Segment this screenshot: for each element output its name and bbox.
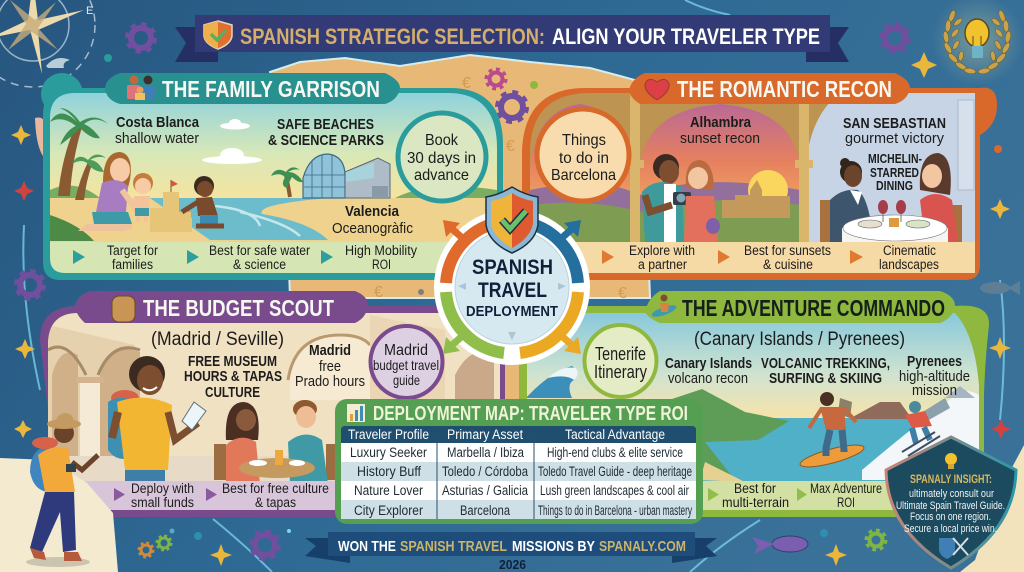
label: costa blanca bbox=[115, 114, 200, 147]
hub text: DEPLOYMENT bbox=[466, 304, 558, 320]
strip: budget takeaways: Deploy with bbox=[131, 481, 194, 496]
subheading: madrid seville: (Madrid / Seville) bbox=[151, 329, 284, 350]
insight text: SPANALY INSIGHT: bbox=[910, 472, 992, 486]
figure: man with camera bbox=[642, 154, 691, 242]
insight text: Secure a local price win. bbox=[904, 523, 997, 535]
table header row: Tactical Advantage bbox=[565, 427, 665, 442]
callout: book 30 days: advance bbox=[414, 167, 469, 184]
header pill bbox=[75, 291, 368, 323]
label: safe beaches: & SCIENCE PARKS bbox=[268, 132, 384, 149]
decorative euro signs bbox=[374, 75, 627, 302]
label: canary islands: Canary Islands bbox=[665, 355, 752, 372]
icon: insight bulb bbox=[945, 453, 957, 469]
scene: alhambra and dining bbox=[530, 93, 978, 243]
label: canary islands bbox=[665, 355, 752, 387]
panel: the budget scout bbox=[40, 291, 505, 517]
table bbox=[239, 450, 315, 478]
heading: THE ADVENTURE COMMANDO bbox=[682, 295, 945, 321]
decorative euro signs: € bbox=[618, 285, 627, 302]
label: madrid prado: free bbox=[319, 358, 341, 375]
label: costa blanca: Costa Blanca bbox=[116, 114, 200, 131]
strip: family takeaways: & science bbox=[233, 257, 286, 272]
label: alhambra bbox=[680, 114, 760, 147]
strip: adventure takeaways: Best for bbox=[734, 481, 776, 496]
callout: things to do: Things bbox=[562, 132, 606, 149]
building: oceanografic bbox=[303, 154, 390, 198]
figure: boy bbox=[182, 176, 224, 226]
callout: madrid budget guide bbox=[370, 326, 442, 398]
label: san sebastian: gourmet victory bbox=[845, 130, 944, 147]
heading: THE FAMILY GARRISON bbox=[162, 76, 380, 102]
strip: romantic takeaways: & cuisine bbox=[763, 257, 813, 272]
row: city explorer: Barcelona bbox=[460, 503, 510, 518]
strip: adventure takeaways: multi-terrain bbox=[722, 495, 789, 510]
figure: backpacker with phone bbox=[108, 356, 206, 484]
figure: child bbox=[133, 173, 153, 222]
figure: woman in coral bbox=[684, 160, 720, 242]
row: luxury seeker: High-end clubs & elite service bbox=[547, 445, 683, 460]
label: madrid prado bbox=[295, 342, 365, 390]
fish: purple bbox=[752, 536, 808, 554]
scene: coast and mountains bbox=[527, 313, 979, 481]
label: pyrenees: mission bbox=[912, 382, 957, 399]
scene: plaza and tapas bbox=[48, 313, 500, 482]
row: nature lover: Asturias / Galicia bbox=[442, 483, 528, 498]
icon: central shield bbox=[486, 187, 538, 253]
row: city explorer: Things to do in Barcelona - urban mastery bbox=[538, 503, 692, 518]
hub text: SPANISH bbox=[472, 256, 553, 279]
compass rose: E bbox=[86, 5, 93, 17]
label: canary islands: volcano recon bbox=[668, 370, 748, 387]
strip: romantic takeaways: a partner bbox=[638, 257, 687, 272]
figure: diner man bbox=[288, 400, 336, 484]
strip: romantic takeaways: landscapes bbox=[879, 257, 939, 272]
quadrant arrows bbox=[446, 223, 578, 353]
subheading: canary pyrenees: (Canary Islands / Pyrenees) bbox=[694, 329, 905, 350]
compass rose bbox=[0, 0, 95, 87]
header pill bbox=[105, 73, 400, 104]
strip: adventure takeaways: ROI bbox=[837, 495, 855, 510]
label: michelin dining: DINING bbox=[876, 178, 913, 193]
decorative euro signs: € bbox=[462, 75, 471, 92]
wave bbox=[526, 366, 577, 398]
callout: book 30 days bbox=[398, 113, 486, 201]
hub text: TRAVEL bbox=[478, 279, 547, 302]
table bbox=[842, 200, 948, 242]
label: michelin dining: MICHELIN- bbox=[868, 151, 922, 166]
hub text bbox=[466, 256, 558, 320]
icon: backpack bbox=[112, 296, 135, 322]
figure: diner woman bbox=[214, 402, 260, 484]
footer text: MISSIONS BY bbox=[512, 538, 595, 555]
figure: diner right bbox=[920, 153, 962, 242]
palm trees bbox=[50, 108, 108, 200]
row: nature lover bbox=[354, 483, 689, 498]
row: city explorer bbox=[354, 503, 692, 518]
hub chevrons bbox=[458, 283, 566, 340]
label: volcanic trekking bbox=[761, 355, 890, 387]
icon: title shield bbox=[204, 21, 232, 49]
strip: family takeaways: ROI bbox=[372, 257, 391, 272]
row: luxury seeker: Luxury Seeker bbox=[350, 445, 427, 460]
figure: mother bbox=[84, 152, 140, 229]
strip: budget takeaways: small funds bbox=[131, 495, 194, 510]
row: nature lover: Nature Lover bbox=[354, 483, 423, 498]
parchment corner: bottom left bbox=[0, 458, 118, 572]
label: san sebastian: SAN SEBASTIAN bbox=[843, 115, 946, 132]
label: pyrenees: Pyrenees bbox=[907, 353, 962, 370]
footer text: SPANALY.COM bbox=[599, 538, 686, 555]
title text: SPANISH STRATEGIC SELECTION: bbox=[240, 24, 545, 49]
palm small bbox=[286, 175, 290, 197]
label: free museum: HOURS & TAPAS bbox=[184, 368, 282, 385]
row: city explorer: City Explorer bbox=[354, 503, 423, 518]
fish: upper right bbox=[980, 281, 1020, 295]
table header row bbox=[348, 427, 665, 442]
table header row: Traveler Profile bbox=[348, 427, 429, 442]
icon: heart bbox=[645, 79, 669, 100]
callout: tenerife itinerary: Tenerife bbox=[595, 344, 646, 364]
insight text bbox=[896, 472, 1005, 535]
label: pyrenees: high-altitude bbox=[899, 368, 970, 385]
heading: THE ROMANTIC RECON bbox=[677, 76, 892, 102]
label: costa blanca: shallow water bbox=[115, 130, 199, 147]
strip: family takeaways: Best for safe water bbox=[209, 243, 310, 258]
label: free museum: FREE MUSEUM bbox=[188, 353, 277, 370]
strip: family takeaways: families bbox=[112, 257, 153, 272]
figure: surfer bbox=[798, 392, 866, 471]
callout: madrid budget guide: guide bbox=[393, 372, 420, 388]
footer text bbox=[338, 538, 686, 555]
snow slope bbox=[862, 391, 985, 480]
clouds bbox=[202, 119, 262, 164]
center hub: spanish travel deployment bbox=[434, 187, 590, 365]
label: alhambra: sunset recon bbox=[680, 130, 760, 147]
label: free museum: CULTURE bbox=[205, 384, 260, 401]
label: madrid prado: Madrid bbox=[309, 342, 351, 359]
volcano bbox=[849, 402, 912, 419]
figure: traveler with backpack bbox=[26, 413, 98, 567]
figure: diner left bbox=[820, 158, 872, 242]
label: safe beaches bbox=[268, 116, 384, 149]
title text: ALIGN YOUR TRAVELER TYPE bbox=[552, 24, 820, 49]
label: valencia bbox=[332, 203, 413, 237]
panel: deployment map table bbox=[335, 399, 703, 524]
label: san sebastian bbox=[843, 115, 946, 147]
parchment corner: bottom right bbox=[960, 445, 1024, 572]
panel: the adventure commando bbox=[519, 291, 989, 517]
table header row: Primary Asset bbox=[447, 427, 523, 442]
header pill bbox=[629, 73, 910, 104]
label: madrid prado: Prado hours bbox=[295, 373, 365, 390]
icon: family bbox=[127, 76, 155, 100]
insight text: ultimately consult our bbox=[909, 488, 994, 500]
label: safe beaches: SAFE BEACHES bbox=[277, 116, 374, 133]
callout: things to do bbox=[537, 109, 629, 201]
row: luxury seeker bbox=[350, 445, 683, 460]
icon: shield and swords bbox=[939, 538, 968, 559]
strip: romantic takeaways: Best for sunsets bbox=[744, 243, 831, 258]
strip: budget takeaways: Best for free culture bbox=[222, 481, 329, 496]
label: volcanic trekking: VOLCANIC TREKKING, bbox=[761, 355, 890, 372]
callout: madrid budget guide: Madrid bbox=[384, 342, 428, 359]
footer banner bbox=[305, 532, 717, 563]
label: pyrenees bbox=[899, 353, 970, 399]
callout: tenerife itinerary bbox=[584, 325, 656, 397]
figure: skier bbox=[902, 401, 940, 456]
strip: family takeaways: High Mobility bbox=[345, 243, 417, 258]
panel: the family garrison bbox=[41, 73, 503, 280]
decorative euro signs: € bbox=[374, 284, 383, 301]
callout: madrid budget guide: budget travel bbox=[373, 357, 439, 373]
strip: romantic takeaways bbox=[570, 242, 975, 273]
row: history buff bbox=[357, 464, 692, 479]
callout: book 30 days: 30 days in bbox=[407, 150, 476, 167]
table rows bbox=[341, 426, 696, 519]
strip: romantic takeaways: Cinematic bbox=[883, 243, 936, 258]
row: history buff: History Buff bbox=[357, 464, 421, 479]
callout: things to do: Barcelona bbox=[551, 167, 616, 184]
icon: bar chart bbox=[347, 404, 365, 422]
insight text: Focus on one region. bbox=[910, 511, 991, 523]
icon: laurel and light bulb bbox=[932, 0, 1024, 86]
row: history buff: Toledo / Córdoba bbox=[442, 464, 528, 479]
label: free museum bbox=[184, 353, 282, 401]
row: nature lover: Lush green landscapes & cool air bbox=[540, 483, 689, 498]
strip: budget takeaways: & tapas bbox=[255, 495, 296, 510]
label: valencia: Oceanogràfic bbox=[332, 220, 413, 237]
callout: spanaly insight shield bbox=[886, 437, 1016, 568]
title banner bbox=[175, 15, 849, 62]
label: volcanic trekking: SURFING & SKIING bbox=[769, 370, 882, 387]
year: 2026 bbox=[499, 558, 526, 572]
panel: the romantic recon bbox=[522, 73, 997, 280]
strip: budget takeaways bbox=[85, 481, 340, 510]
icon: surfer bbox=[650, 294, 678, 319]
sandcastle bbox=[150, 180, 192, 232]
label: michelin dining bbox=[868, 151, 922, 193]
row: history buff: Toledo Travel Guide - deep heritage bbox=[538, 464, 692, 479]
callout: book 30 days: Book bbox=[425, 132, 459, 149]
row: luxury seeker: Marbella / Ibiza bbox=[447, 445, 524, 460]
scene: beach bbox=[50, 93, 500, 244]
label: alhambra: Alhambra bbox=[690, 114, 752, 131]
decorative euro signs: € bbox=[506, 138, 515, 155]
map of Spain backdrop bbox=[270, 55, 650, 405]
strip: family takeaways bbox=[50, 242, 497, 273]
callout: tenerife itinerary: Itinerary bbox=[594, 362, 647, 382]
label: valencia: Valencia bbox=[345, 203, 400, 220]
callout: things to do: to do in bbox=[559, 150, 609, 167]
footer text: WON THE bbox=[338, 538, 396, 555]
green headland bbox=[669, 389, 789, 480]
heading: THE BUDGET SCOUT bbox=[143, 295, 334, 321]
footer text: SPANISH TRAVEL bbox=[400, 538, 507, 555]
title text bbox=[240, 24, 820, 49]
table heading: DEPLOYMENT MAP: TRAVELER TYPE ROI bbox=[373, 403, 688, 425]
header pill bbox=[645, 291, 955, 323]
strip: romantic takeaways: Explore with bbox=[629, 243, 695, 258]
label: michelin dining: STARRED bbox=[870, 165, 919, 180]
strip: adventure takeaways bbox=[695, 481, 895, 510]
strip: family takeaways: Target for bbox=[107, 243, 158, 258]
strip: adventure takeaways: Max Adventure bbox=[810, 481, 882, 496]
